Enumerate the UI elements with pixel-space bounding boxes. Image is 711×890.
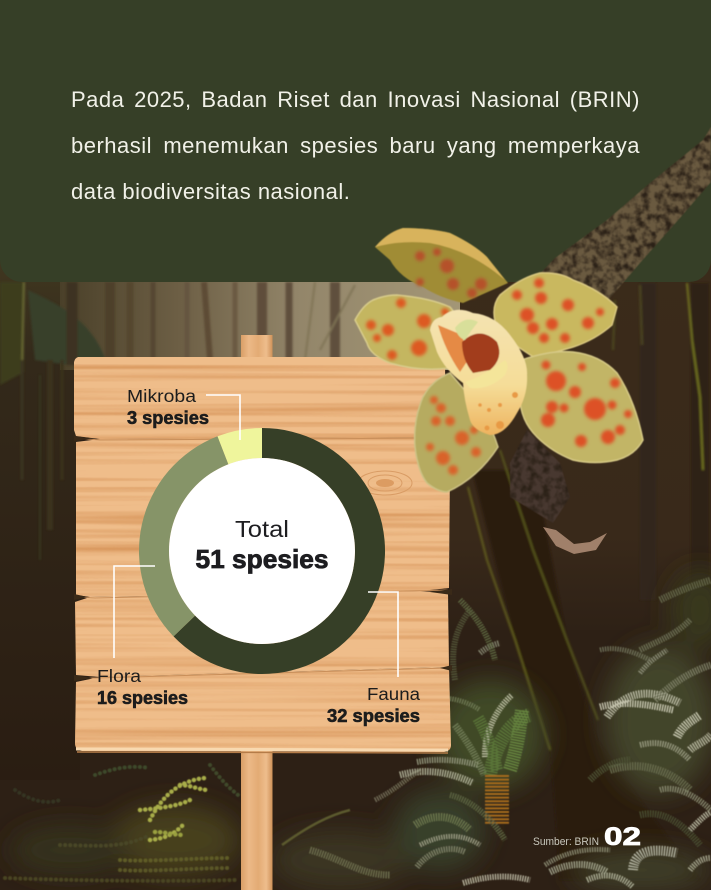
decorative fern fronds [607,694,680,717]
centre total label [196,516,328,574]
decorative leaf clusters [5,765,238,881]
top green panel [0,0,711,282]
callout: flora: Flora [97,666,141,686]
centre total label: 51 spesies [196,544,328,574]
donut chart [139,428,385,674]
signpost [74,335,452,890]
petal: lower right [520,352,643,462]
forest background photo [0,260,711,890]
page number: 02 [604,823,641,851]
callout: mikroba [127,386,240,440]
source note: Sumber: BRIN [533,836,599,848]
mikroba segment [218,428,262,464]
sign plank shading [74,436,452,753]
flora segment [139,436,228,636]
petal: lower left [415,373,498,492]
donut centre [169,458,355,644]
callout: fauna: 32 spesies [327,706,420,726]
callout: fauna [327,592,420,726]
orchid lip [430,310,527,435]
fauna segment [174,428,385,674]
callout: fauna: Fauna [367,684,420,704]
orchid flower [355,228,643,492]
orchid stem [510,127,711,554]
wooden sign planks [74,357,451,752]
intro paragraph [71,87,640,204]
callout: flora: 16 spesies [97,688,188,708]
intro paragraph: berhasil menemukan spesies baru yang memperkaya [71,133,640,158]
petal: left [355,295,458,369]
petal: top [375,228,508,303]
intro paragraph: data biodiversitas nasional. [71,179,350,204]
wooden post [241,335,272,890]
intro paragraph: Pada 2025, Badan Riset dan Inovasi Nasional (BRIN) [71,87,640,112]
callout: mikroba: Mikroba [127,386,196,406]
petal: right [494,273,617,358]
callout: flora [97,566,188,708]
centre total label: Total [235,516,289,542]
callout: mikroba: 3 spesies [127,408,209,428]
